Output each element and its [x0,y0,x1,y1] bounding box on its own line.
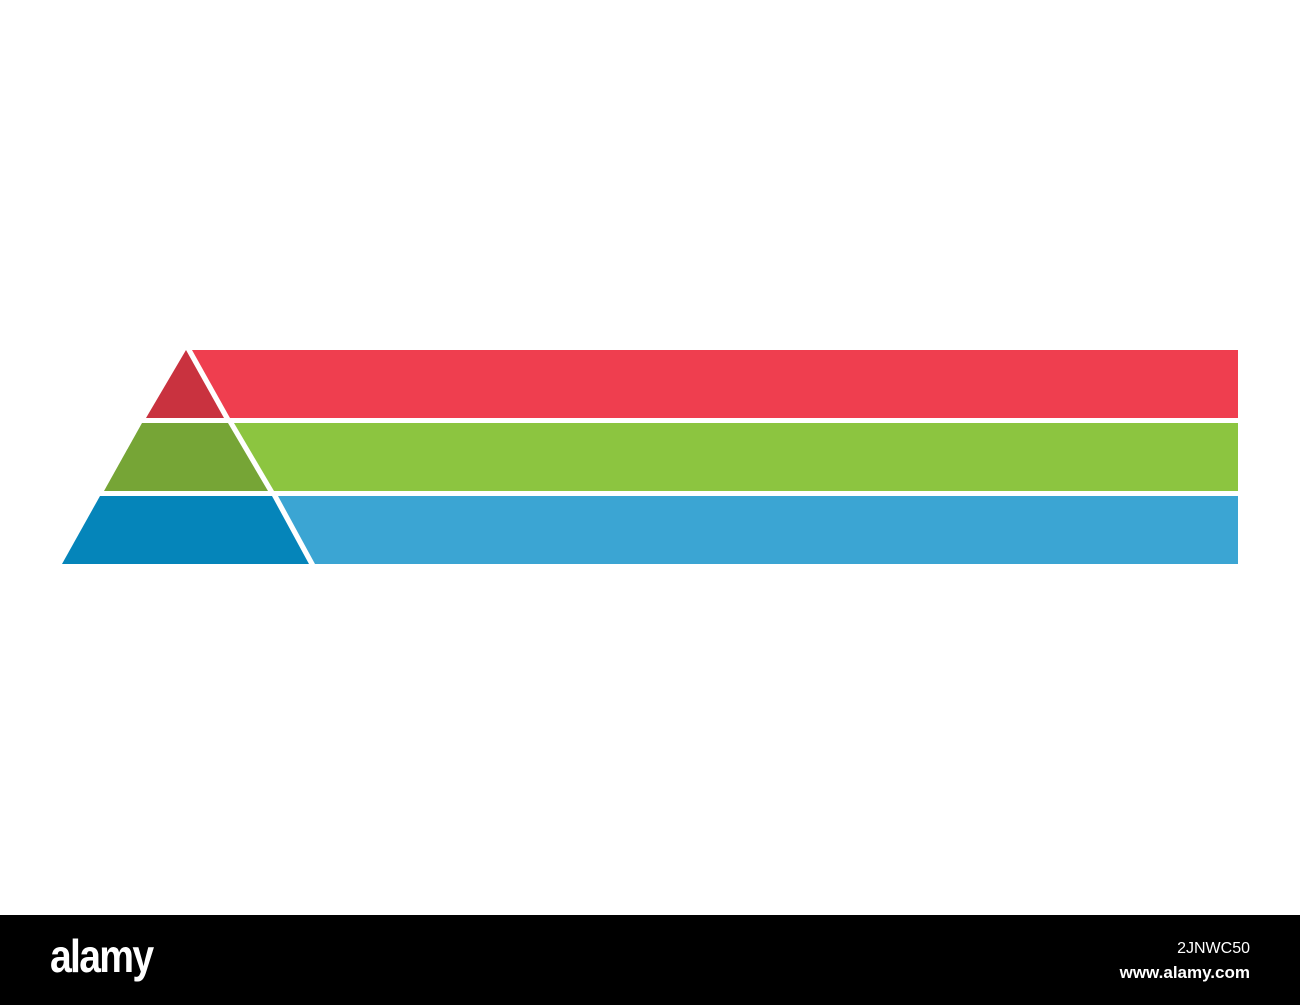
tier: green middle [104,423,1238,491]
tier: red top [146,350,1238,418]
tier: blue bottom [62,496,1238,564]
footer id text: 2JNWC50 [1177,940,1250,957]
footer bar [0,915,1300,1005]
footer id text [1120,940,1250,982]
footer logo: alamy [50,930,152,982]
footer id text: www.alamy.com [1120,963,1250,982]
